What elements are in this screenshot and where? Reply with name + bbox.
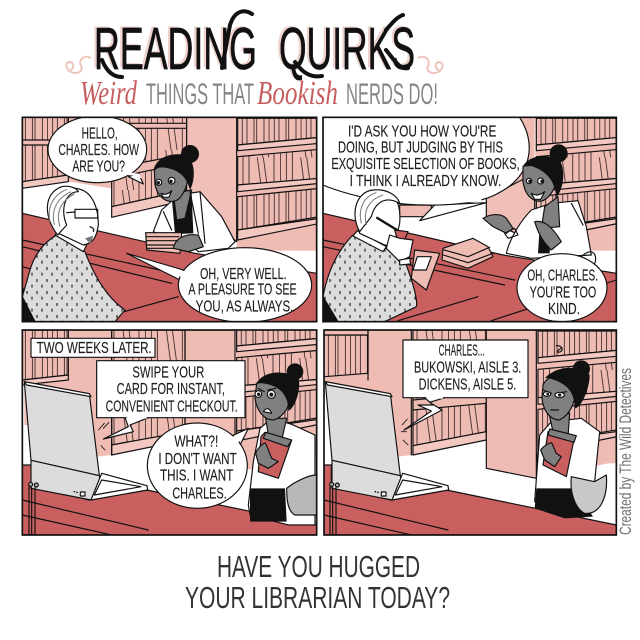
speech bubble: what: WHAT?! — [174, 433, 218, 450]
speech bubble: Oh very well — [127, 248, 312, 322]
flourish: left curl — [66, 57, 91, 73]
speech bubble: I'd ask you: I'D ASK YOU HOW YOU'RE — [348, 124, 496, 141]
speech bubble: what — [147, 423, 248, 508]
speech bubble: Oh very well: OH, VERY WELL. — [200, 266, 287, 283]
caption: two weeks later — [31, 338, 155, 357]
speech bubble: what: THIS. I WANT — [160, 468, 234, 485]
speech bubble: swipe your card: SWIPE YOUR — [132, 364, 204, 381]
panel: machine replies about Charles — [324, 330, 620, 535]
title: READING — [94, 16, 257, 82]
speech bubble: I'd ask you: I THINK I ALREADY KNOW. — [350, 173, 501, 190]
speech bubble: Oh Charles: KIND. — [548, 301, 580, 318]
librarian — [483, 144, 591, 258]
speech bubble: swipe your card: CARD FOR INSTANT, — [117, 381, 225, 398]
librarian — [248, 363, 317, 525]
back wall and shelves — [399, 118, 616, 251]
back wall and shelves — [324, 330, 620, 478]
caption: two weeks later: TWO WEEKS LATER. — [37, 340, 152, 357]
subtitle: THINGS THAT — [146, 78, 254, 111]
footer question: YOUR LIBRARIAN TODAY? — [185, 580, 450, 615]
panel: librarian compliments Charles — [323, 115, 619, 322]
Charles — [323, 190, 417, 322]
back wall and shelves — [22, 117, 320, 251]
title: QUIRKS — [276, 14, 412, 80]
back wall and shelves — [23, 330, 316, 470]
desk — [22, 465, 317, 535]
speech bubble: Hello Charles — [48, 116, 147, 184]
speech bubble: Hello Charles: ARE YOU? — [72, 159, 125, 176]
speech box: Charles Bukowski: BUKOWSKI, AISLE 3. — [414, 359, 521, 376]
self-checkout screen — [325, 382, 449, 535]
speech bubble: I'd ask you — [323, 115, 529, 221]
footer question — [185, 549, 450, 615]
speech bubble: what: CHARLES. — [172, 485, 227, 502]
Charles — [22, 186, 125, 322]
stack of books — [442, 238, 493, 268]
speech bubble: swipe your card — [97, 361, 245, 450]
footer question: HAVE YOU HUGGED — [217, 549, 420, 584]
book on desk — [411, 250, 440, 290]
speech box: Charles Bukowski: CHARLES... — [439, 343, 485, 360]
speech bubble: Hello Charles: CHARLES. HOW — [58, 142, 139, 159]
speech bubble: Oh Charles: YOU'RE TOO — [530, 284, 596, 301]
desk — [324, 465, 616, 535]
speech box: Charles Bukowski — [401, 340, 528, 445]
subtitle: Weird — [80, 75, 138, 112]
speech bubble: swipe your card: CONVENIENT CHECKOUT. — [106, 399, 238, 416]
speech bubble: Oh very well: A PLEASURE TO SEE — [188, 282, 297, 299]
self-checkout screen — [24, 382, 148, 535]
speech bubble: Oh Charles — [517, 252, 607, 322]
speech bubble: I'd ask you: EXQUISITE SELECTION OF BOOKS, — [331, 156, 520, 173]
speech bubble: I'd ask you: DOING, BUT JUDGING BY THIS — [338, 140, 503, 157]
panel: librarian greets Charles — [22, 116, 320, 322]
speech bubble: what: I DON'T WANT — [158, 451, 237, 468]
subtitle: NERDS DO! — [346, 78, 438, 111]
subtitle: Bookish — [257, 75, 338, 112]
panel: self checkout two weeks later — [22, 318, 319, 535]
speech box: Charles Bukowski: DICKENS, AISLE 5. — [419, 377, 516, 394]
librarian — [146, 145, 235, 253]
title: QUIRKS — [279, 16, 415, 82]
title: READING — [92, 14, 254, 80]
credit: Created by The Wild Detectives — [616, 368, 635, 535]
flourish: right curl — [418, 57, 443, 73]
desk — [323, 213, 616, 322]
desk — [22, 213, 317, 322]
speech bubble: Hello Charles: HELLO, — [82, 125, 118, 142]
subtitle — [80, 75, 438, 112]
speech bubble: Oh very well: YOU, AS ALWAYS. — [196, 298, 293, 315]
speech bubble: Oh Charles: OH, CHARLES. — [527, 268, 598, 285]
librarian — [535, 346, 607, 518]
